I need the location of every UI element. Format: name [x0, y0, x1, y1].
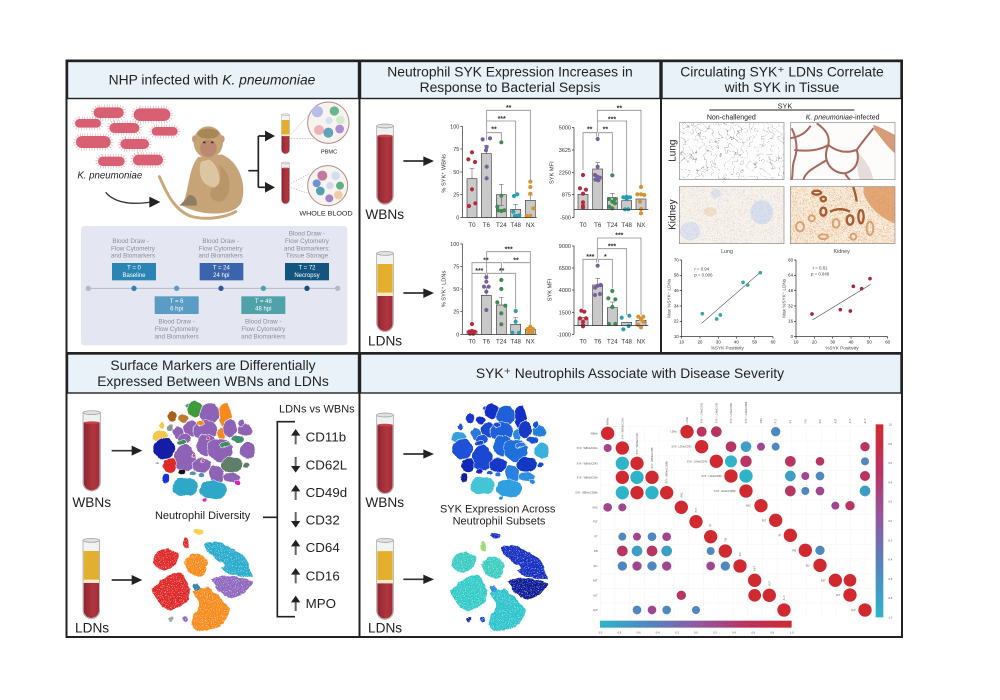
color bar: vertical: -0.8	[888, 596, 893, 600]
bar chart: % SYK+ WBNs: **	[506, 105, 512, 112]
marker: CD64 up: CD64	[306, 540, 340, 555]
tSNE map: WBN diversity	[153, 400, 255, 502]
axis labels: WBN rows	[575, 432, 598, 612]
label: SYK Expression Across Neutrophil Subsets: Neutrophil Subsets	[453, 516, 546, 528]
icon: PBMC cells	[291, 102, 349, 143]
scatter plot: kidney correlation: 16	[788, 319, 794, 324]
axis labels: LDN columns: ANC	[760, 418, 763, 423]
axis labels: LDN columns: PT	[789, 420, 792, 423]
axis labels: WBN rows: ALP	[593, 609, 598, 612]
axis labels: WBN rows: PT	[594, 536, 598, 539]
axis labels: WBN columns: PT	[710, 523, 713, 527]
icon: whole blood cells	[291, 166, 348, 206]
axis labels: LDN columns: ALP	[864, 418, 867, 423]
bar chart: % SYK+ LDNs: T6	[483, 338, 490, 345]
heading: Circulating SYK+ LDNs: with SYK in Tissue	[724, 79, 840, 95]
bar chart: % SYK+ WBNs: 75	[453, 147, 459, 153]
bar chart: SYK MFI WBNs: NX	[637, 222, 645, 229]
timepoint: T=72: Necropsy	[294, 273, 320, 279]
color bar: horizontal: 0.0	[694, 631, 698, 635]
label: Lung caption: Lung	[721, 249, 733, 255]
color bar: horizontal: -0.4	[655, 631, 660, 635]
axis labels: WBN rows: SYK⁺ WBNs/CD66	[577, 476, 598, 479]
axis labels: WBN columns: SYK⁺ WBNs/CD66b	[666, 461, 669, 484]
axis labels: LDN columns: ALT	[849, 418, 852, 423]
scatter plot: kidney correlation: 64	[788, 273, 794, 278]
image: lung infected	[790, 123, 895, 180]
timeline panel	[81, 226, 347, 345]
color bar: vertical: 0.8	[888, 442, 893, 446]
heading: NHP infected	[68, 62, 358, 98]
bar chart: SYK MFI WBNs	[550, 105, 648, 229]
color bar: vertical: 0.6	[888, 461, 893, 465]
axis labels: WBN rows: WBNs	[591, 432, 598, 435]
timepoint: T=0: and Biomarkers	[111, 253, 155, 260]
axis labels: WBN columns: AST	[754, 566, 757, 571]
icon: macaque	[159, 126, 243, 218]
bar chart: % SYK+ WBNs: **	[491, 127, 497, 134]
icon: whole blood tube	[281, 162, 290, 204]
label: LDNs vs WBNs: LDNs vs WBNs	[279, 403, 355, 415]
bar chart: SYK MFI WBNs: **	[617, 105, 622, 112]
bar chart: SYK MFI LDNs: T48	[621, 338, 633, 345]
timepoint: T=0	[111, 238, 156, 280]
marker: CD32 down	[291, 512, 340, 528]
grid	[600, 426, 872, 617]
label: Neutrophil Diversity: Neutrophil Diversity	[155, 510, 251, 522]
charts and tubes	[365, 105, 648, 349]
label: Kidney: Kidney	[668, 199, 679, 230]
panel: Circulating SYK+ LDNs	[661, 60, 902, 353]
color bar: vertical	[876, 423, 893, 619]
icon: LDN tube	[377, 251, 393, 332]
axis labels: WBN columns	[606, 417, 786, 600]
scatter plot: lung correlation: 46	[674, 288, 679, 293]
color bar: vertical: -0.6	[888, 577, 893, 581]
timepoint: T=6: Blood Draw -	[158, 319, 195, 326]
timepoint: T=72: Flow Cytometry	[285, 238, 330, 245]
scatter plot: lung correlation	[667, 257, 776, 351]
timepoint: T=24	[199, 238, 243, 280]
label: Lung: Lung	[668, 140, 679, 162]
scatter plot: kidney correlation: 0	[791, 334, 794, 339]
bar chart: SYK MFI WBNs: T24	[607, 222, 618, 229]
correlogram: WBNs	[601, 427, 791, 617]
label: Non-challenged: Non-challenged	[707, 115, 756, 122]
arrows: branching to tubes	[248, 131, 275, 193]
heading: Circulating SYK+ LDNs: Circulating SYK⁺ LDNs Correlate	[680, 64, 884, 80]
axis labels: LDN columns: AST	[834, 418, 837, 423]
timepoint: T=24: 24 hpi	[213, 273, 229, 279]
timepoint: T=48: and Biomarkers	[241, 333, 285, 340]
scatter plot: kidney correlation	[781, 257, 891, 351]
scatter plot: kidney correlation: %SYK Positivity	[825, 346, 859, 351]
timepoint: T=72: Tissue Storage	[286, 253, 329, 260]
color bar: horizontal: -1.0	[598, 631, 603, 635]
tissue staining and correlations	[667, 101, 895, 351]
timepoint: T=72: T = 72	[298, 266, 316, 272]
bar chart: % SYK+ LDNs: ***	[505, 246, 513, 253]
label: K. pneumoniae-infected: K. pneumoniae-infected	[806, 115, 880, 122]
scatter plot: lung correlation: 40	[734, 340, 739, 345]
label: WBNs: WBNs	[72, 495, 111, 510]
label: SYK column header: SYK	[778, 101, 792, 110]
scatter plot: lung correlation: 58	[674, 273, 679, 278]
axis labels: WBN rows: ANC	[592, 506, 598, 509]
bar chart: SYK MFI LDNs	[548, 233, 648, 345]
axis labels: WBN columns: SYK⁺ WBNs/CD41	[621, 418, 624, 439]
arrow: LDN	[403, 575, 434, 584]
scatter plot: kidney correlation: 30	[830, 340, 836, 345]
color bar: vertical: -1.0	[888, 615, 893, 619]
bar chart: SYK MFI LDNs: ***	[615, 233, 624, 240]
heading: Disease Severity	[360, 354, 901, 393]
color bar: vertical: -0.4	[888, 558, 893, 562]
SYK maps	[365, 403, 556, 635]
heading: Disease Severity: SYK⁺ Neutrophils Associate with Disease Severity	[476, 365, 784, 381]
bar chart: % SYK+ LDNs: **	[499, 268, 505, 275]
diversity maps and marker list	[72, 400, 355, 635]
marker: CD64 up	[291, 540, 340, 555]
bar chart: % SYK+ LDNs	[440, 242, 537, 345]
panel: Surface Markers	[66, 353, 360, 637]
timepoint: T=48: T = 48	[255, 299, 273, 305]
axis labels: WBN rows: SYK⁺ WBNs/CD41	[577, 447, 598, 450]
arrow: LDN	[112, 575, 142, 585]
tSNE map: WBN SYK expression	[452, 403, 549, 500]
bar chart: SYK MFI WBNs: T0	[579, 222, 587, 229]
image: kidney infected	[790, 187, 895, 244]
arrow: infection	[106, 192, 160, 208]
color bar: vertical: 1.0	[888, 423, 893, 427]
bar chart: SYK MFI WBNs: 5000	[559, 126, 571, 132]
timepoint: T=72: Blood Draw -	[289, 231, 325, 238]
scatter plot: kidney correlation: p = 0.049	[811, 271, 830, 276]
axis labels: LDN rows: SYK⁺ LDNs/CD41	[671, 446, 692, 449]
timepoint: T=72	[284, 231, 330, 280]
color bar: horizontal: 0.8	[770, 631, 775, 635]
bar chart: SYK MFI WBNs: T48	[621, 222, 633, 229]
axis labels: WBN rows: SCr	[593, 565, 598, 568]
timepoint: T=0: T = 0	[127, 266, 142, 272]
label: WBNs: WBNs	[365, 495, 404, 510]
bar chart: % SYK+ LDNs: T0	[468, 338, 476, 345]
tSNE map: LDN SYK expression	[451, 533, 547, 631]
marker: MPO up	[291, 596, 336, 611]
image: lung non-challenged	[679, 123, 784, 180]
axis labels: LDN rows: SCr	[806, 564, 810, 567]
axis labels: LDN rows: SYK⁺ LDNs/CD66b	[714, 490, 736, 493]
color bar: horizontal: -0.8	[617, 631, 622, 635]
correlation matrix: SYK and disease severity	[575, 401, 893, 635]
color bar: horizontal	[598, 621, 794, 635]
timepoint: T=6: 6 hpi	[170, 307, 183, 313]
illustration: infection and sampling	[74, 102, 353, 345]
scatter plot: lung correlation: 10	[674, 334, 679, 339]
axis labels: LDN rows: PT	[778, 534, 782, 537]
bar chart: SYK MFI LDNs: -1000	[557, 332, 571, 338]
bar chart: SYK MFI LDNs: T24	[607, 338, 618, 345]
bar chart: SYK MFI WBNs: 2250	[559, 170, 571, 176]
bar chart: SYK MFI LDNs: 4000	[559, 288, 571, 294]
bar chart: % SYK+ WBNs: T6	[483, 222, 490, 229]
timepoint: T=24: Flow Cytometry	[199, 245, 243, 252]
color bar: horizontal: 0.6	[751, 631, 756, 635]
scatter plot: kidney correlation: r = 0.81	[813, 266, 828, 271]
arrow: LDN	[403, 288, 434, 298]
image: kidney non-challenged	[679, 187, 784, 244]
axis labels: LDN rows: SYK⁺ LDNs/CD66	[701, 475, 722, 478]
axis labels: WBN columns: ANC	[680, 492, 683, 498]
label: LDNs: LDNs	[368, 620, 402, 635]
axis labels: WBN rows: AST	[593, 579, 598, 582]
color bar: horizontal: 0.2	[713, 631, 717, 635]
scatter plot: kidney correlation: Max %SYK⁺ LDNs	[781, 278, 786, 318]
scatter plot: kidney correlation: 40	[849, 340, 854, 345]
bar chart: % SYK+ WBNs: T48	[510, 222, 522, 229]
bar chart: % SYK+ WBNs: 0	[456, 215, 459, 221]
scatter plot: lung correlation: %SYK Positivity	[711, 346, 745, 351]
bar chart: % SYK+ LDNs: NX	[526, 338, 535, 345]
axis labels: WBN columns: FIB	[724, 537, 727, 542]
color bar: horizontal: -0.2	[674, 631, 679, 635]
label: SYK Expression Across Neutrophil Subsets	[440, 504, 556, 528]
axis labels: LDN rows: SYK⁺ LDNs/CD43	[687, 460, 708, 463]
color bar: vertical: 0.2	[888, 500, 893, 504]
scatter plot: lung correlation: 20	[698, 340, 703, 345]
bar chart: SYK MFI LDNs: SYK MFI	[548, 278, 554, 301]
tSNE map: LDN diversity	[153, 529, 252, 631]
bar chart: SYK MFI LDNs: 9000	[559, 244, 571, 250]
bar chart: % SYK+ WBNs: 100	[450, 124, 459, 130]
bar chart: % SYK+ WBNs: 50	[453, 170, 459, 176]
label: SYK Expression Across Neutrophil Subsets: SYK Expression Across	[440, 504, 556, 516]
axis labels: LDN rows: FIB	[792, 549, 796, 552]
scatter plot: lung correlation: 50	[752, 340, 758, 345]
scatter plot: lung correlation: p = 0.006	[694, 273, 713, 278]
scatter plot: lung correlation: r = 0.94	[694, 267, 710, 272]
axis labels: LDN rows: LDNs	[670, 430, 677, 433]
bar chart: % SYK+ LDNs: **	[513, 257, 519, 264]
heading: Surface Markers: Expressed Between WBNs and LDNs	[97, 373, 329, 389]
axis labels: LDN rows: ALP	[851, 609, 856, 612]
bar chart: % SYK+ LDNs: 75	[453, 264, 459, 270]
marker: CD11b up: CD11b	[306, 429, 346, 444]
icon: K. pneumoniae bacteria	[74, 106, 179, 167]
scatter plot: kidney correlation: 80	[788, 257, 794, 262]
axis labels: LDN rows: ANC	[746, 505, 751, 508]
timeline axis	[86, 286, 340, 291]
label: K. pneumoniae: K. pneumoniae	[77, 171, 143, 182]
correlogram: LDNs	[680, 425, 872, 617]
icon: WBN tube	[83, 411, 100, 491]
timepoint: T=0: Blood Draw -	[112, 238, 149, 245]
heading: Surface Markers: Surface Markers are Differentially	[110, 357, 316, 373]
panel: NHP infected with K. pneumoniae	[66, 60, 360, 353]
label: WBNs: WBNs	[365, 207, 404, 222]
icon: WBN tube	[377, 124, 393, 204]
marker: CD49d up: CD49d	[306, 485, 347, 500]
panel: SYK+ Neutrophils Associate with Disease Severity	[360, 353, 902, 637]
color bar: vertical: 0.4	[888, 480, 893, 484]
bar chart: % SYK+ LDNs: T24	[496, 338, 507, 345]
scatter plot: lung correlation: Max %SYK⁺ LDNs	[667, 278, 672, 318]
color bar: vertical: -0.2	[888, 538, 893, 542]
bar chart: SYK MFI LDNs: NX	[637, 338, 645, 345]
axis labels: LDN columns: LDNs	[686, 416, 689, 423]
timepoint: T=24: T = 24	[213, 266, 231, 272]
marker: CD16 up	[291, 568, 340, 583]
timepoint: T=72: and Biomarkers;	[284, 245, 330, 252]
bar chart: SYK MFI LDNs: T6	[594, 338, 602, 345]
bar chart: SYK MFI WBNs: **	[603, 127, 608, 134]
bar chart: % SYK+ WBNs: T0	[468, 222, 476, 229]
color bar: horizontal: 1.0	[790, 631, 794, 635]
axis labels: WBN rows: FIB	[594, 550, 598, 553]
bar chart: % SYK+ WBNs: % SYK⁺ WBNs	[440, 154, 447, 193]
axis labels: WBN columns: SYK⁺ WBNs/CD43	[636, 433, 639, 454]
bar chart: SYK MFI WBNs: -500	[560, 216, 571, 222]
label: LDNs: LDNs	[75, 620, 109, 635]
scatter plot: kidney correlation: 48	[788, 288, 794, 293]
bar chart: SYK MFI LDNs: 1500	[559, 310, 571, 316]
timepoint: T=48: 48 hpi	[255, 307, 271, 313]
bar chart: % SYK+ LDNs: 25	[453, 310, 459, 316]
bracket	[263, 422, 295, 617]
axis labels: LDN columns: SYK⁺ LDNs/CD41	[701, 402, 704, 423]
axis labels: WBN columns: SYK⁺ WBNs/CD66	[651, 447, 654, 469]
axis labels: WBN columns: SCr	[739, 552, 742, 556]
scatter plot: kidney correlation: 50	[867, 340, 872, 345]
timepoint: T=0: Flow Cytometry	[111, 245, 156, 252]
axis labels: LDN rows: ALT	[836, 594, 841, 597]
bar chart: % SYK+ WBNs: 25	[453, 193, 459, 199]
heading: Neutrophil SYK Expression: Response to Bacterial Sepsis	[420, 79, 600, 95]
bar chart: SYK MFI LDNs: ***	[586, 254, 595, 261]
axis labels: LDN columns: SCr	[819, 419, 822, 423]
icon: LDN tube	[377, 538, 393, 619]
axis labels: WBN columns: ALT	[768, 581, 771, 586]
scatter plot: lung correlation: 10	[679, 340, 685, 345]
axis labels: WBN rows: PLT	[593, 521, 598, 524]
heading: Circulating SYK+ LDNs	[662, 62, 901, 98]
icon: WBN tube	[377, 413, 393, 494]
bar chart: % SYK+ WBNs	[440, 105, 537, 229]
scatter plot: kidney correlation: 20	[812, 340, 817, 345]
bar chart: SYK MFI WBNs: SYK MFI	[550, 161, 556, 184]
bar chart: % SYK+ LDNs: **	[483, 257, 489, 264]
axis labels: WBN rows: SYK⁺ WBNs/CD43	[577, 462, 598, 465]
marker: MPO up: MPO	[306, 596, 336, 611]
timepoint: T=6: T = 6	[170, 299, 184, 305]
bar chart: % SYK+ LDNs: T48	[510, 338, 522, 345]
arrow: WBN	[112, 446, 142, 456]
timepoint: T=24: and Biomarkers	[199, 253, 243, 260]
timepoint: T=0: Baseline	[123, 273, 146, 279]
icon: PBMC tube	[281, 114, 290, 154]
heading: Neutrophil SYK Expression: Neutrophil SYK Expression Increases in	[387, 64, 633, 80]
arrow: WBN	[403, 449, 434, 459]
axis labels: LDN rows: AST	[821, 579, 826, 582]
axis labels: LDN columns	[686, 401, 867, 423]
axis labels: WBN columns: PLT	[695, 507, 698, 512]
bar chart: % SYK+ LDNs: % SYK⁺ LDNs	[440, 271, 447, 307]
label: PBMC: PBMC	[321, 149, 337, 155]
timepoint: T=48: Flow Cytometry	[241, 326, 286, 333]
marker: CD32 down: CD32	[306, 513, 340, 528]
timepoint: T=6: Flow Cytometry	[155, 326, 199, 333]
bar chart: % SYK+ WBNs: NX	[526, 222, 535, 229]
marker: CD16 up: CD16	[306, 568, 340, 583]
bar chart: SYK MFI LDNs: ***	[608, 243, 616, 250]
axis labels: LDN columns: PLT	[775, 418, 778, 423]
scatter plot: kidney correlation: 32	[788, 303, 794, 308]
bar chart: SYK MFI LDNs: T0	[579, 338, 587, 345]
bar chart: SYK MFI WBNs: **	[587, 127, 593, 134]
bar chart: % SYK+ WBNs: ***	[498, 116, 506, 123]
bar chart: SYK MFI WBNs: 3625	[559, 148, 571, 154]
marker: CD62L down: CD62L	[306, 458, 347, 473]
axis labels: WBN columns: WBNs	[606, 417, 609, 425]
label: LDNs: LDNs	[368, 334, 402, 349]
heading: Neutrophil SYK Expression	[360, 62, 660, 98]
axis labels: WBN columns: ALP	[783, 595, 786, 600]
timepoint: T=24: Blood Draw -	[202, 238, 239, 245]
axis labels: WBN rows: ALT	[593, 594, 598, 597]
axis labels: LDN columns: FIB	[804, 419, 807, 423]
axis labels: LDN columns: SYK⁺ LDNs/CD43	[715, 402, 718, 423]
heading: Surface Markers	[68, 354, 358, 393]
axis labels: WBN rows: SYK⁺ WBNs/CD66b	[575, 492, 598, 495]
bar chart: % SYK+ WBNs: T24	[496, 222, 507, 229]
scatter plot: lung correlation: 34	[674, 303, 679, 308]
bar chart: SYK MFI LDNs: *	[604, 254, 607, 261]
bar chart: % SYK+ LDNs: 100	[450, 242, 459, 248]
bar chart: SYK MFI WBNs: T6	[594, 222, 602, 229]
axis labels: LDN columns: SYK⁺ LDNs/CD66	[730, 402, 733, 423]
axis labels: LDN rows	[670, 430, 856, 612]
bar chart: % SYK+ LDNs: ***	[475, 268, 484, 275]
timepoint: T=6	[155, 296, 199, 340]
label: Kidney caption: Kidney	[834, 249, 850, 255]
scatter plot: lung correlation: 22	[674, 319, 679, 324]
label: whole blood: WHOLE BLOOD	[299, 211, 353, 218]
scatter plot: kidney correlation: 10	[794, 340, 799, 345]
scatter plot: lung correlation: 30	[716, 340, 721, 345]
scatter plot: lung correlation: 70	[674, 257, 679, 262]
arrow: WBN	[403, 156, 434, 166]
timepoint: T=48	[241, 296, 286, 340]
heading: NHP infected: NHP infected with K. pneumoniae	[109, 72, 316, 88]
timepoint: T=6: and Biomarkers	[155, 333, 199, 340]
bar chart: SYK MFI WBNs: 875	[562, 193, 571, 199]
color bar: horizontal: 0.4	[732, 631, 736, 635]
axis labels: LDN columns: SYK⁺ LDNs/CD66b	[745, 401, 748, 423]
bar chart: % SYK+ LDNs: 0	[456, 332, 459, 338]
panel: Neutrophil SYK Expression	[360, 60, 661, 353]
bar chart: SYK MFI LDNs: 6500	[559, 266, 571, 272]
timepoint: T=48: Blood Draw -	[245, 319, 282, 326]
icon: LDN tube	[83, 538, 100, 619]
axis labels: LDN rows: PLT	[762, 519, 767, 522]
bar chart: % SYK+ LDNs: 50	[453, 287, 459, 293]
scatter plot: lung correlation: 60	[771, 340, 776, 345]
bar chart: SYK MFI WBNs: ***	[608, 117, 616, 124]
color bar: horizontal: -0.6	[636, 631, 641, 635]
color bar: vertical: 0.0	[888, 519, 893, 523]
scatter plot: kidney correlation: 60	[885, 340, 891, 345]
